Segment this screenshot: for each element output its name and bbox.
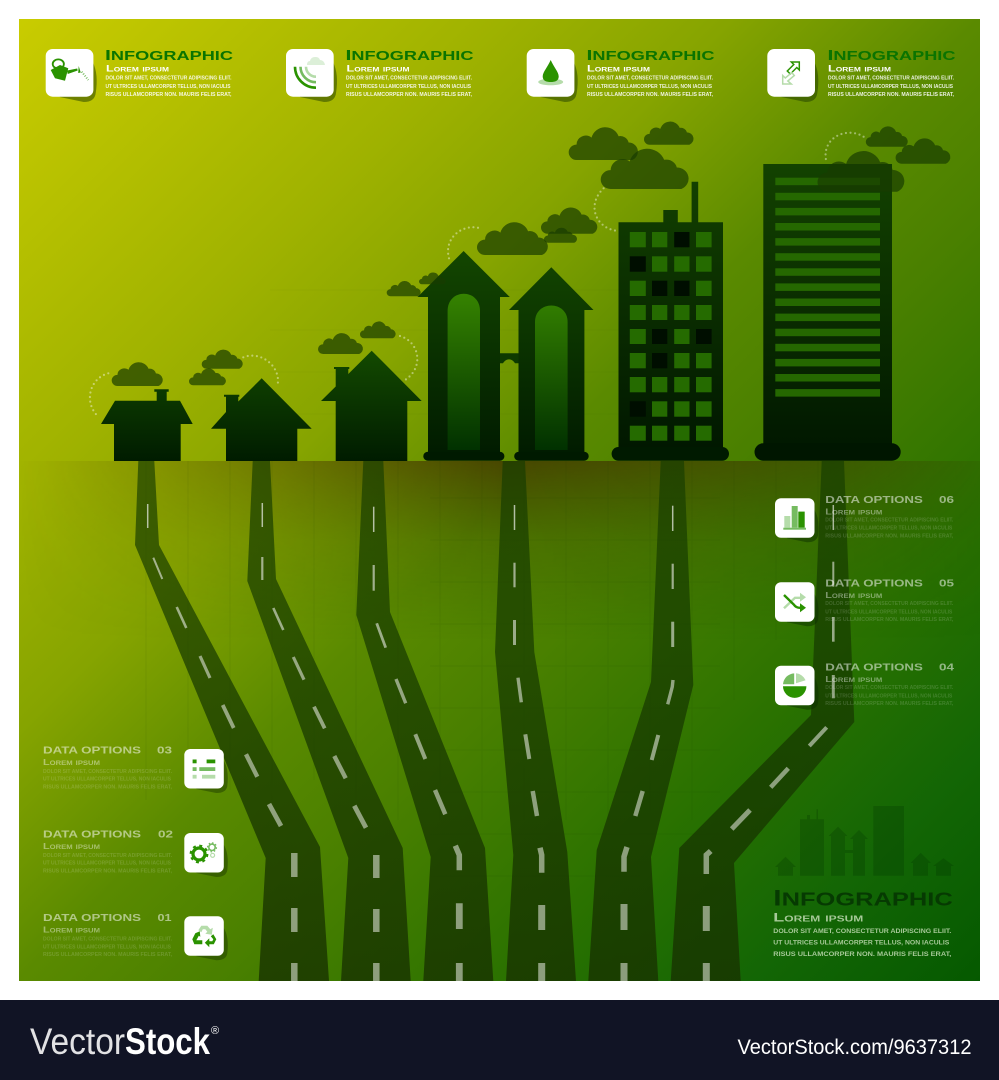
number: 04 <box>939 662 954 674</box>
body text: UT ULTRICES ULLAMCORPER TELLUS, NON IACULIS <box>587 84 713 90</box>
body text: UT ULTRICES ULLAMCORPER TELLUS, NON IACULIS <box>825 609 953 615</box>
data option 04 <box>775 662 954 710</box>
subheading: Lorem ipsum <box>825 506 882 516</box>
road 4 <box>495 461 576 981</box>
body text: DOLOR SIT AMET, CONSECTETUR ADIPISCING ELIIT. <box>828 76 955 82</box>
house 1 <box>101 389 193 461</box>
icon: diagonal arrows <box>767 49 818 102</box>
label: DATA OPTIONS <box>825 662 923 674</box>
logo: Stock <box>125 1021 210 1062</box>
office tower with windows <box>612 182 729 461</box>
stock url: VectorStock.com/9637312 <box>738 1036 972 1059</box>
body text: UT ULTRICES ULLAMCORPER TELLUS, NON IACULIS <box>346 84 472 90</box>
subheading: Lorem ipsum <box>43 925 100 935</box>
road 5 <box>588 461 693 981</box>
body text <box>825 517 954 539</box>
body text: DOLOR SIT AMET, CONSECTETUR ADIPISCING ELIIT. <box>773 928 951 935</box>
icon: bar chart <box>775 498 818 542</box>
heading: INFOGRAPHIC <box>586 47 714 64</box>
header block 4: arrows <box>767 47 956 102</box>
label: DATA OPTIONS <box>825 578 923 590</box>
subheading: Lorem ipsum <box>587 64 650 74</box>
body text: UT ULTRICES ULLAMCORPER TELLUS, NON IACULIS <box>825 693 953 699</box>
number: 05 <box>939 578 954 590</box>
icon: signal and cloud <box>286 49 337 102</box>
number: 06 <box>939 494 954 506</box>
icon: watering can <box>46 49 97 102</box>
data option 02 <box>43 828 228 877</box>
subheading: Lorem ipsum <box>43 757 100 767</box>
road 6 <box>671 461 854 981</box>
body text <box>828 76 955 98</box>
heading: INFOGRAPHIC <box>773 886 953 911</box>
body text: UT ULTRICES ULLAMCORPER TELLUS, NON IACULIS <box>825 526 953 532</box>
body text: UT ULTRICES ULLAMCORPER TELLUS, NON IACULIS <box>43 777 172 783</box>
dotted cloud trails <box>90 133 864 417</box>
footer block: infographic summary <box>773 886 953 958</box>
icon: list <box>184 749 228 793</box>
heading: INFOGRAPHIC <box>346 47 474 64</box>
body text: DOLOR SIT AMET, CONSECTETUR ADIPISCING ELIIT. <box>346 76 473 82</box>
icon: shuffle <box>775 582 818 626</box>
body text: RISUS ULLAMCORPER NON. MAURIS FELIS ERAT, <box>587 92 714 98</box>
body text: UT ULTRICES ULLAMCORPER TELLUS, NON IACULIS <box>43 861 172 867</box>
data option 05 <box>775 578 954 626</box>
house 2 <box>211 378 312 461</box>
number: 01 <box>158 912 172 924</box>
body text <box>106 76 232 98</box>
data option 01 <box>43 912 228 960</box>
twin towers <box>418 251 594 461</box>
body text: RISUS ULLAMCORPER NON. MAURIS FELIS ERAT, <box>773 951 951 958</box>
body text: DOLOR SIT AMET, CONSECTETUR ADIPISCING ELIIT. <box>825 517 954 523</box>
body text <box>825 601 954 623</box>
body text: UT ULTRICES ULLAMCORPER TELLUS, NON IACULIS <box>106 84 231 90</box>
small skyline <box>775 806 954 876</box>
icon: gears <box>184 833 228 877</box>
body text: RISUS ULLAMCORPER NON. MAURIS FELIS ERAT, <box>43 952 173 958</box>
body text: RISUS ULLAMCORPER NON. MAURIS FELIS ERAT, <box>825 701 954 707</box>
body text <box>773 928 951 958</box>
icon: pie chart <box>775 666 818 710</box>
logo: Vector <box>30 1021 125 1062</box>
subheading: Lorem ipsum <box>346 64 410 74</box>
body text: RISUS ULLAMCORPER NON. MAURIS FELIS ERAT, <box>825 617 954 623</box>
body text <box>825 685 954 707</box>
body text: RISUS ULLAMCORPER NON. MAURIS FELIS ERAT, <box>825 533 954 539</box>
road 3 <box>356 461 493 981</box>
body text: RISUS ULLAMCORPER NON. MAURIS FELIS ERAT, <box>43 868 173 874</box>
body text <box>346 76 473 98</box>
label: DATA OPTIONS <box>43 912 141 924</box>
subheading: Lorem ipsum <box>773 910 864 924</box>
body text: UT ULTRICES ULLAMCORPER TELLUS, NON IACULIS <box>828 84 954 90</box>
body text <box>587 76 714 98</box>
clouds <box>112 122 950 386</box>
subheading: Lorem ipsum <box>825 590 882 600</box>
body text: DOLOR SIT AMET, CONSECTETUR ADIPISCING ELIIT. <box>43 937 173 943</box>
body text: DOLOR SIT AMET, CONSECTETUR ADIPISCING ELIIT. <box>43 853 173 859</box>
road 1 <box>135 461 329 981</box>
heading: INFOGRAPHIC <box>105 47 233 64</box>
subheading: Lorem ipsum <box>106 64 169 74</box>
subheading: Lorem ipsum <box>43 841 100 851</box>
icon: recycle <box>184 916 228 960</box>
house 3 <box>321 351 422 461</box>
striped skyscraper <box>754 164 901 461</box>
subheading: Lorem ipsum <box>828 64 891 74</box>
icon: water drop <box>527 49 578 102</box>
body text: DOLOR SIT AMET, CONSECTETUR ADIPISCING ELIIT. <box>825 601 954 607</box>
label: DATA OPTIONS <box>43 745 141 757</box>
data option 06 <box>775 494 954 542</box>
watermark bar <box>0 1000 999 1080</box>
subheading: Lorem ipsum <box>825 674 882 684</box>
body text: RISUS ULLAMCORPER NON. MAURIS FELIS ERAT, <box>346 92 473 98</box>
label: DATA OPTIONS <box>43 828 141 840</box>
body text <box>43 769 173 790</box>
header block 2: signal and cloud <box>286 47 474 102</box>
header block 1: watering can <box>46 47 233 102</box>
number: 02 <box>158 828 173 840</box>
data option 03 <box>43 745 228 793</box>
body text: DOLOR SIT AMET, CONSECTETUR ADIPISCING ELIIT. <box>43 769 173 775</box>
body text: RISUS ULLAMCORPER NON. MAURIS FELIS ERAT, <box>106 92 232 98</box>
label: DATA OPTIONS <box>825 494 923 506</box>
heading: INFOGRAPHIC <box>828 47 956 64</box>
logo: ® <box>211 1025 219 1037</box>
body text: RISUS ULLAMCORPER NON. MAURIS FELIS ERAT, <box>828 92 955 98</box>
body text: UT ULTRICES ULLAMCORPER TELLUS, NON IACULIS <box>43 944 172 950</box>
body text: RISUS ULLAMCORPER NON. MAURIS FELIS ERAT, <box>43 784 173 790</box>
header block 3: water drop <box>527 47 714 102</box>
body text: UT ULTRICES ULLAMCORPER TELLUS, NON IACULIS <box>773 940 950 946</box>
ground shadow below the horizon <box>60 461 978 602</box>
body text: DOLOR SIT AMET, CONSECTETUR ADIPISCING ELIIT. <box>106 76 232 82</box>
logo <box>30 1021 219 1062</box>
number: 03 <box>157 745 172 757</box>
body text: DOLOR SIT AMET, CONSECTETUR ADIPISCING ELIIT. <box>825 685 954 691</box>
body text: DOLOR SIT AMET, CONSECTETUR ADIPISCING ELIIT. <box>587 76 714 82</box>
body text <box>43 937 173 958</box>
road 2 <box>247 461 411 981</box>
body text <box>43 853 173 874</box>
